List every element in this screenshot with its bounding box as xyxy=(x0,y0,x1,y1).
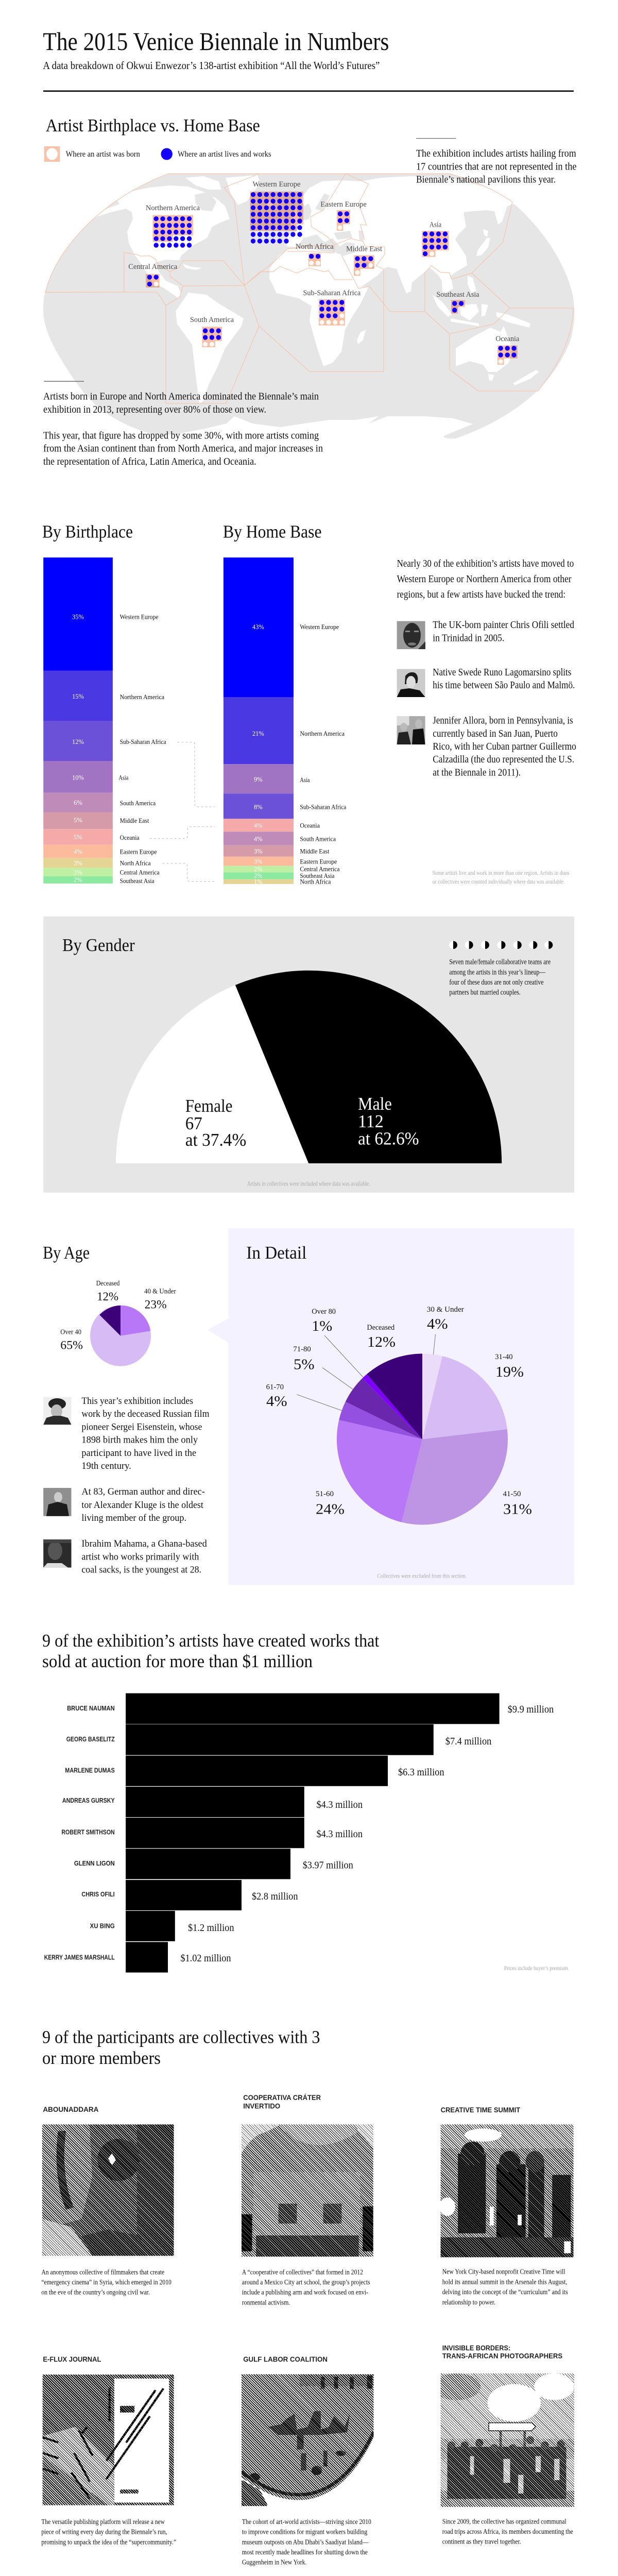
leader lines xyxy=(297,1334,436,1411)
card: Invisible Borders: TRANS-AFRICAN PHOTOGRAPHERS xyxy=(442,2351,562,2360)
artist names: CHRIS OFILI xyxy=(81,1891,115,1898)
age detail labels: 41-50 xyxy=(503,1490,521,1498)
home base percentages: 2% xyxy=(254,866,263,873)
home base labels: Sub-Saharan Africa xyxy=(300,803,347,810)
legend xyxy=(44,146,271,162)
card: Creative Time Summit: CREATIVE TIME SUMMIT xyxy=(441,2106,521,2114)
female label: at 37.4% xyxy=(185,1130,246,1150)
birthplace percentages: 5% xyxy=(74,817,82,824)
panel: by birthplace xyxy=(42,521,166,885)
pie chart: age detail xyxy=(337,1354,508,1525)
card: Invisible Borders: Since 2009, the collective has organized communal xyxy=(442,2518,566,2526)
age detail labels: Over 80 xyxy=(312,1308,336,1316)
card: Cooperativa Cráter Invertido: A “cooperative of collectives” that formed in 2012 xyxy=(242,2269,363,2276)
female label: 67 xyxy=(185,1113,202,1133)
card: Creative Time Summit: hold its annual summit in the Arsenale this August, xyxy=(442,2278,567,2286)
price values: $2.8 million xyxy=(252,1891,298,1902)
map region labels: South America xyxy=(190,316,234,324)
home base labels: Southeast Asia xyxy=(300,872,335,879)
card: Gulf Labor Coalition: The cohort of art-world activists—striving since 2010 xyxy=(242,2518,371,2526)
map commentary text: the representation of Africa, Latin America, and Oceania. xyxy=(43,456,256,467)
card: Cooperativa Cráter Invertido: ronmental activism. xyxy=(242,2299,290,2307)
map region labels: Northern America xyxy=(146,204,200,212)
header rule xyxy=(43,91,574,92)
heading: collectives: or more members xyxy=(42,2048,161,2068)
portrait: Runo Lagomarsino xyxy=(397,669,425,697)
half pie chart: gender xyxy=(116,971,502,1163)
card: Creative Time Summit: relationship to power. xyxy=(442,2299,495,2307)
birthplace percentages: 15% xyxy=(72,693,84,700)
subtitle: A data breakdown of Okwui Enwezor’s 138-artist exhibition “All the World’s Futures” xyxy=(43,59,380,72)
map region labels: Central America xyxy=(128,263,178,271)
duos note: partners but married couples. xyxy=(449,989,521,997)
age detail labels: 4% xyxy=(266,1393,287,1410)
card: Cooperativa Cráter Invertido xyxy=(242,2093,373,2307)
photo: Abounaddara film still xyxy=(42,2125,174,2256)
map commentary text: This year, that figure has dropped by some 30%, with more artists coming xyxy=(43,430,319,441)
home base percentages: 3% xyxy=(254,858,263,865)
panel: age in detail xyxy=(208,1228,574,1585)
map region labels: North Africa xyxy=(296,243,334,251)
duos note: Seven male/female collaborative teams are xyxy=(449,958,551,967)
Kluge text: living member of the group. xyxy=(81,1513,186,1523)
card: Gulf Labor Coalition: Guggenheim in New York. xyxy=(242,2558,306,2567)
age detail labels: Deceased xyxy=(367,1324,395,1332)
home base percentages: 21% xyxy=(252,730,264,737)
birthplace percentages: 3% xyxy=(74,869,82,876)
card: Invisible Borders: continent as they travel together. xyxy=(442,2538,521,2546)
price values: $4.3 million xyxy=(316,1828,363,1840)
age detail labels: 30 & Under xyxy=(427,1306,464,1314)
home base percentages: 8% xyxy=(254,803,263,810)
home base labels: Asia xyxy=(300,776,310,784)
card: e-flux journal: promising to unpack the idea of the “supercommunity.” xyxy=(41,2539,176,2546)
artist names: GLENN LIGON xyxy=(74,1860,115,1867)
card: Abounaddara: “emergency cinema” in Syria, which emerged in 2010 xyxy=(41,2279,171,2286)
Ofili text: in Trinidad in 2005. xyxy=(433,633,504,644)
card: Cooperativa Cráter Invertido: INVERTIDO xyxy=(243,2102,280,2110)
birthplace labels: Middle East xyxy=(120,817,149,824)
legend: lives swatch xyxy=(161,148,173,160)
portrait: Alexander Kluge xyxy=(43,1488,71,1516)
heading: auction records xyxy=(42,1631,380,1671)
age detail labels: 71-80 xyxy=(293,1345,311,1353)
portrait: Chris Ofili xyxy=(397,621,425,649)
home base percentages: 1% xyxy=(254,878,263,885)
map inland seas xyxy=(195,192,494,269)
price values: $6.3 million xyxy=(398,1767,444,1778)
photo: Cooperativa Cráter Invertido xyxy=(242,2125,373,2257)
card: Abounaddara xyxy=(41,2105,174,2297)
birthplace labels: Northern America xyxy=(120,693,165,701)
title: The 2015 Venice Biennale in Numbers xyxy=(43,27,389,56)
panel: auction records xyxy=(42,1631,569,1973)
map region labels: Oceania xyxy=(495,335,520,343)
stacked bar: home base xyxy=(224,557,294,884)
callout: unrepresented countries: 17 countries that are not represented in the xyxy=(416,161,577,172)
Allora text: at the Biennale in 2011). xyxy=(433,768,521,778)
card: e-flux journal: The versatile publishing platform will release a new xyxy=(41,2518,165,2526)
map region labels: Middle East xyxy=(346,245,383,253)
home base percentages: 9% xyxy=(254,776,263,783)
Kluge text xyxy=(81,1486,205,1523)
heading: collectives xyxy=(42,2027,320,2068)
footnote: age: Collectives were excluded from this section. xyxy=(377,1572,467,1580)
callout: unrepresented countries: Biennale’s national pavilions this year. xyxy=(416,175,556,185)
world map xyxy=(43,174,574,438)
Allora text: Rico, with her Cuban partner Guillermo xyxy=(433,741,576,752)
price values: $1.2 million xyxy=(188,1922,234,1934)
home base labels: Middle East xyxy=(300,848,330,855)
male label: at 62.6% xyxy=(358,1128,419,1149)
artist names: BRUCE NAUMAN xyxy=(67,1705,115,1712)
home base percentages: 4% xyxy=(254,822,263,829)
map region labels: Southeast Asia xyxy=(437,291,479,299)
age detail labels: 12% xyxy=(367,1334,396,1350)
half moons: seven duos xyxy=(449,941,553,949)
home base labels: Western Europe xyxy=(300,623,339,631)
male label: 112 xyxy=(358,1111,384,1131)
legend: born swatch xyxy=(44,146,60,162)
map ocean xyxy=(43,174,574,438)
Eisenstein text: work by the deceased Russian film xyxy=(81,1409,210,1419)
artist names: ANDREAS GURSKY xyxy=(62,1797,115,1804)
birthplace labels xyxy=(118,613,166,885)
map land masses xyxy=(85,175,539,403)
panel: artist birthplace vs home base xyxy=(43,115,577,467)
age detail labels: 4% xyxy=(427,1316,448,1332)
card: e-flux journal xyxy=(41,2355,176,2546)
birthplace labels: North Africa xyxy=(120,859,151,867)
female label xyxy=(185,1096,246,1150)
age overview labels xyxy=(60,1279,176,1351)
heading: by birthplace: By Birthplace xyxy=(42,521,133,541)
Kluge text: At 83, German author and direc- xyxy=(81,1486,205,1497)
home base labels: Oceania xyxy=(300,822,320,829)
heading: artist birthplace vs home base: Artist Birthplace vs. Home Base xyxy=(46,115,260,135)
map commentary text xyxy=(43,381,323,467)
Allora text xyxy=(433,715,576,778)
moved intro text: regions, but a few artists have bucked the trend: xyxy=(397,589,565,600)
Eisenstein text: 1898 birth makes him the only xyxy=(81,1434,198,1446)
age detail labels: 61-70 xyxy=(266,1383,284,1391)
heading: in detail: In Detail xyxy=(246,1243,307,1263)
home base blue dots xyxy=(147,192,517,358)
duos note: among the artists in this year’s lineup— xyxy=(449,968,545,976)
heading: by gender: By Gender xyxy=(62,935,135,955)
heading: by home base: By Home Base xyxy=(223,521,321,541)
map region labels: Asia xyxy=(430,221,441,229)
Mahama text: Ibrahim Mahama, a Ghana-based xyxy=(81,1538,207,1549)
artist names: XU BING xyxy=(90,1922,115,1929)
birthplace labels: Asia xyxy=(118,774,129,782)
card: Gulf Labor Coalition: most recently made headlines for shutting down the xyxy=(242,2549,368,2556)
female slice xyxy=(116,985,308,1163)
portrait: Ibrahim Mahama xyxy=(43,1539,71,1568)
photo: Gulf Labor Coalition xyxy=(242,2374,373,2506)
artist names: GEORG BASELITZ xyxy=(66,1736,115,1743)
panel: by gender xyxy=(43,917,574,1193)
Eisenstein text: This year’s exhibition includes xyxy=(81,1396,193,1406)
card: Abounaddara: An anonymous collective of filmmakers that create xyxy=(41,2269,164,2276)
card: Invisible Borders: road trips across Africa, its members documenting the xyxy=(442,2528,573,2536)
card: Gulf Labor Coalition: to improve conditions for migrant workers building xyxy=(242,2529,367,2536)
footnote: regions: or collectives were counted individually where data was available. xyxy=(433,878,564,885)
home base labels xyxy=(300,623,347,886)
home base percentages: 43% xyxy=(252,623,264,631)
Ofili text: The UK-born painter Chris Ofili settled xyxy=(433,620,574,631)
legend: lives label: Where an artist lives and works xyxy=(178,150,271,159)
Ofili text xyxy=(433,620,574,644)
price values: $7.4 million xyxy=(445,1736,491,1747)
birthplace percentages: 3% xyxy=(74,859,82,867)
age overview labels: Over 40 xyxy=(60,1328,81,1335)
price values: $9.9 million xyxy=(508,1704,554,1715)
card: Abounaddara: on the eve of the country’s ongoing civil war. xyxy=(41,2289,150,2297)
price values xyxy=(180,1704,554,1964)
card: Creative Time Summit xyxy=(439,2106,574,2307)
Eisenstein text: pioneer Sergei Eisenstein, whose xyxy=(81,1422,202,1432)
panel: artists who moved xyxy=(397,558,576,885)
age detail labels: 31-40 xyxy=(495,1353,513,1361)
age overview labels: 12% xyxy=(97,1290,118,1303)
birthplace labels: Oceania xyxy=(120,834,140,841)
Kluge text: tor Alexander Kluge is the oldest xyxy=(81,1500,204,1511)
Eisenstein text: participant to have lived in the xyxy=(81,1448,196,1459)
panel: collectives xyxy=(41,2027,579,2576)
birthplace labels: Eastern Europe xyxy=(120,849,157,856)
photo: Creative Time Summit xyxy=(439,2125,574,2257)
home base labels: North Africa xyxy=(300,878,331,886)
portrait: Sergei Eisenstein xyxy=(43,1397,71,1425)
home base percentages: 3% xyxy=(254,848,263,855)
card: Creative Time Summit: New York City-based nonprofit Creative Time will xyxy=(442,2268,565,2276)
age detail labels: 1% xyxy=(312,1318,332,1334)
footnote: regions xyxy=(433,869,570,885)
birthplace percentages xyxy=(72,613,84,884)
age overview labels: 40 & Under xyxy=(144,1287,176,1295)
home base labels: South America xyxy=(300,836,336,843)
duos note: four of these duos are not only creative xyxy=(449,978,543,987)
card: e-flux journal: E-FLUX JOURNAL xyxy=(43,2355,101,2363)
age detail labels: 5% xyxy=(294,1356,315,1372)
age detail labels: 51-60 xyxy=(316,1490,334,1498)
card: Gulf Labor Coalition: museum outposts on Abu Dhabi’s Saadiyat Island— xyxy=(242,2539,369,2546)
duos note xyxy=(449,958,551,997)
price values: $3.97 million xyxy=(303,1860,353,1871)
birthplace percentages: 12% xyxy=(72,738,84,745)
moved intro text: Nearly 30 of the exhibition’s artists have moved to xyxy=(397,558,574,569)
card: Creative Time Summit: delving into the concept of the “curriculum” and its xyxy=(442,2289,568,2296)
birthplace labels: South America xyxy=(120,800,156,807)
price values: $4.3 million xyxy=(316,1799,363,1810)
moved intro text: Western Europe or Northern America from other xyxy=(397,574,572,585)
legend: born label: Where an artist was born xyxy=(66,150,140,159)
male label: Male xyxy=(358,1094,392,1114)
home base percentages: 2% xyxy=(254,872,263,879)
birthplace labels: Southeast Asia xyxy=(120,877,154,885)
map commentary text: Artists born in Europe and North America dominated the Biennale’s main xyxy=(43,392,319,402)
card: Gulf Labor Coalition xyxy=(242,2355,373,2567)
age detail labels: 31% xyxy=(503,1501,532,1518)
heading: auction records: sold at auction for more than $1 million xyxy=(42,1651,313,1671)
card: Gulf Labor Coalition: GULF LABOR COALITION xyxy=(243,2355,328,2363)
panel: by age xyxy=(43,1243,210,1575)
Lagomarsino text xyxy=(433,667,575,691)
map region labels: Sub-Saharan Africa xyxy=(303,289,361,297)
birthplace percentages: 5% xyxy=(74,834,82,841)
birthplace labels: Western Europe xyxy=(120,613,159,620)
home base labels: Eastern Europe xyxy=(300,858,337,865)
artist names: KERRY JAMES MARSHALL xyxy=(44,1954,115,1961)
footnote: regions: Some artists live and work in more than one region. Artists in duos xyxy=(433,869,570,876)
map commentary text: exhibition in 2013, representing over 80% of those on view. xyxy=(43,404,266,415)
card: Cooperativa Cráter Invertido: around a Mexico City art school, the group’s projects xyxy=(242,2279,370,2286)
Allora text: Calzadilla (the duo represented the U.S. xyxy=(433,754,574,765)
heading: by age: By Age xyxy=(43,1243,90,1263)
male label xyxy=(358,1094,419,1149)
heading: collectives: 9 of the participants are collectives with 3 xyxy=(42,2027,320,2047)
map region labels xyxy=(128,180,520,343)
Eisenstein text xyxy=(81,1396,210,1471)
artist names: MARLENE DUMAS xyxy=(65,1767,115,1774)
age detail labels xyxy=(266,1306,532,1518)
Lagomarsino text: his time between São Paulo and Malmö. xyxy=(433,680,575,691)
region borders xyxy=(45,174,573,403)
birthplace percentages: 35% xyxy=(72,613,84,620)
card: Abounaddara: ABOUNADDARA xyxy=(43,2105,98,2113)
stacked bar: birthplace xyxy=(43,557,113,884)
heading: auction records: 9 of the exhibition’s artists have created works that xyxy=(42,1631,380,1651)
Mahama text: artist who works primarily with xyxy=(81,1552,199,1562)
portrait: Allora and Calzadilla xyxy=(397,716,425,744)
map region labels: Eastern Europe xyxy=(320,200,367,209)
birthplace white dots xyxy=(154,225,503,364)
age overview labels: 23% xyxy=(145,1298,167,1311)
Mahama text xyxy=(81,1538,207,1575)
photo: e-flux journal xyxy=(43,2375,174,2505)
arrows: region rank changes xyxy=(150,742,215,882)
callout: unrepresented countries: The exhibition includes artists hailing from xyxy=(416,148,576,159)
Eisenstein text: 19th century. xyxy=(81,1461,131,1471)
home base labels: Central America xyxy=(300,866,340,873)
Mahama text: coal sacks, is the youngest at 28. xyxy=(81,1564,201,1575)
callout: unrepresented countries xyxy=(416,138,577,185)
birthplace labels: Central America xyxy=(120,869,160,876)
age detail labels: 24% xyxy=(316,1501,345,1518)
birthplace percentages: 6% xyxy=(74,799,82,806)
card: Invisible Borders xyxy=(433,2344,574,2546)
pie chart: age overview xyxy=(90,1306,151,1366)
card: Cooperativa Cráter Invertido: COOPERATIVA CRÁTER xyxy=(243,2093,321,2102)
price values: $1.02 million xyxy=(180,1953,231,1964)
birthplace percentages: 2% xyxy=(74,876,82,884)
home base percentages: 4% xyxy=(254,836,263,843)
age overview labels: Deceased xyxy=(96,1279,120,1287)
card: Cooperativa Cráter Invertido: include a publishing arm and work focused on envi- xyxy=(242,2289,368,2297)
artist names xyxy=(44,1705,115,1961)
female label: Female xyxy=(185,1096,233,1116)
photo: Invisible Borders team xyxy=(433,2374,574,2507)
card: e-flux journal: piece of writing every day during the Biennale’s run, xyxy=(41,2529,167,2536)
age overview labels: 65% xyxy=(60,1338,83,1351)
home base percentages xyxy=(252,623,264,885)
map region labels: Western Europe xyxy=(252,180,301,189)
card: Invisible Borders: INVISIBLE BORDERS: xyxy=(442,2344,510,2352)
birthplace labels: Sub-Saharan Africa xyxy=(120,738,166,745)
male slice xyxy=(235,971,502,1163)
home base labels: Northern America xyxy=(300,730,345,737)
artist names: ROBERT SMITHSON xyxy=(61,1829,115,1836)
birthplace squares (salmon) xyxy=(146,192,518,365)
Lagomarsino text: Native Swede Runo Lagomarsino splits xyxy=(433,667,571,678)
bar chart: auction prices xyxy=(126,1693,500,1973)
Allora text: Jennifer Allora, born in Pennsylvania, is xyxy=(433,715,573,726)
birthplace percentages: 4% xyxy=(74,848,82,855)
birthplace percentages: 10% xyxy=(72,774,84,781)
panel: by home base xyxy=(223,521,347,886)
footnote: auction: Prices include buyer’s premium. xyxy=(504,1964,569,1972)
footnote: gender: Artists in collectives were included where data was available. xyxy=(247,1180,370,1187)
Allora text: currently based in San Juan, Puerto xyxy=(433,728,558,739)
moved intro text xyxy=(397,558,574,600)
map commentary text: from the Asian continent than from North America, and major increases in xyxy=(43,444,323,454)
age detail labels: 19% xyxy=(495,1364,524,1380)
